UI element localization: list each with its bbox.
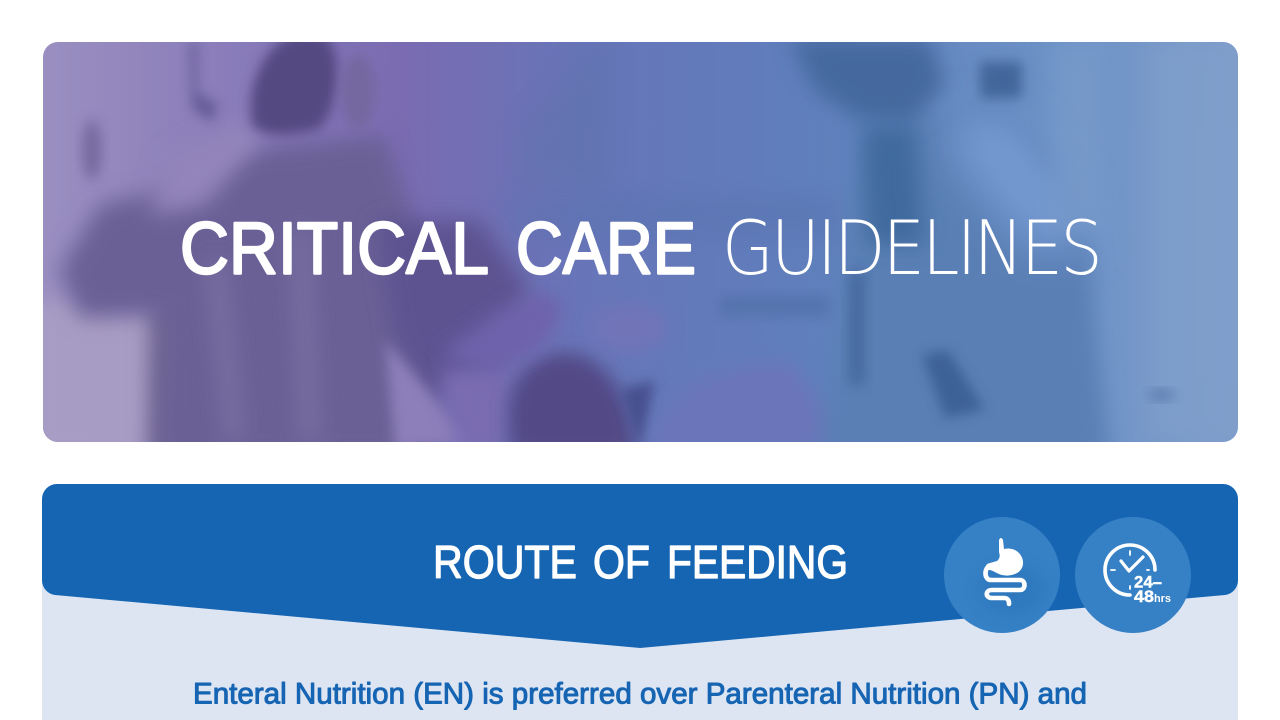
header ribbon [42, 484, 1238, 648]
title: critical care guidelines [180, 204, 1100, 292]
hero banner [30, 30, 1238, 460]
blurred photo: nurse on the left [30, 30, 530, 460]
panel: route of feeding [42, 484, 1238, 720]
icon: clock with 24-48 hrs: 48 [1134, 588, 1154, 606]
icon: clock with 24-48 hrs [1075, 517, 1191, 633]
heading: route of feeding [433, 536, 848, 588]
body text: Enteral Nutrition (EN) is preferred over Parenteral Nutrition (PN) and [193, 678, 1087, 710]
blurred photo: doctor on the right [792, 42, 1172, 442]
heading: route of feeding: OF [593, 536, 650, 588]
heading: route of feeding: ROUTE [433, 536, 577, 588]
blurred photo: patient in the centre [385, 45, 860, 455]
icon: stomach and intestines [944, 517, 1060, 633]
heading: route of feeding: FEEDING [667, 536, 848, 588]
icon: clock with 24-48 hrs: 24– [1134, 574, 1162, 592]
title: critical care guidelines: GUIDELINES [722, 204, 1100, 292]
icon: clock with 24-48 hrs: hrs [1154, 593, 1171, 605]
title: critical care guidelines: CRITICAL [180, 208, 489, 290]
title: critical care guidelines: CARE [516, 208, 696, 290]
